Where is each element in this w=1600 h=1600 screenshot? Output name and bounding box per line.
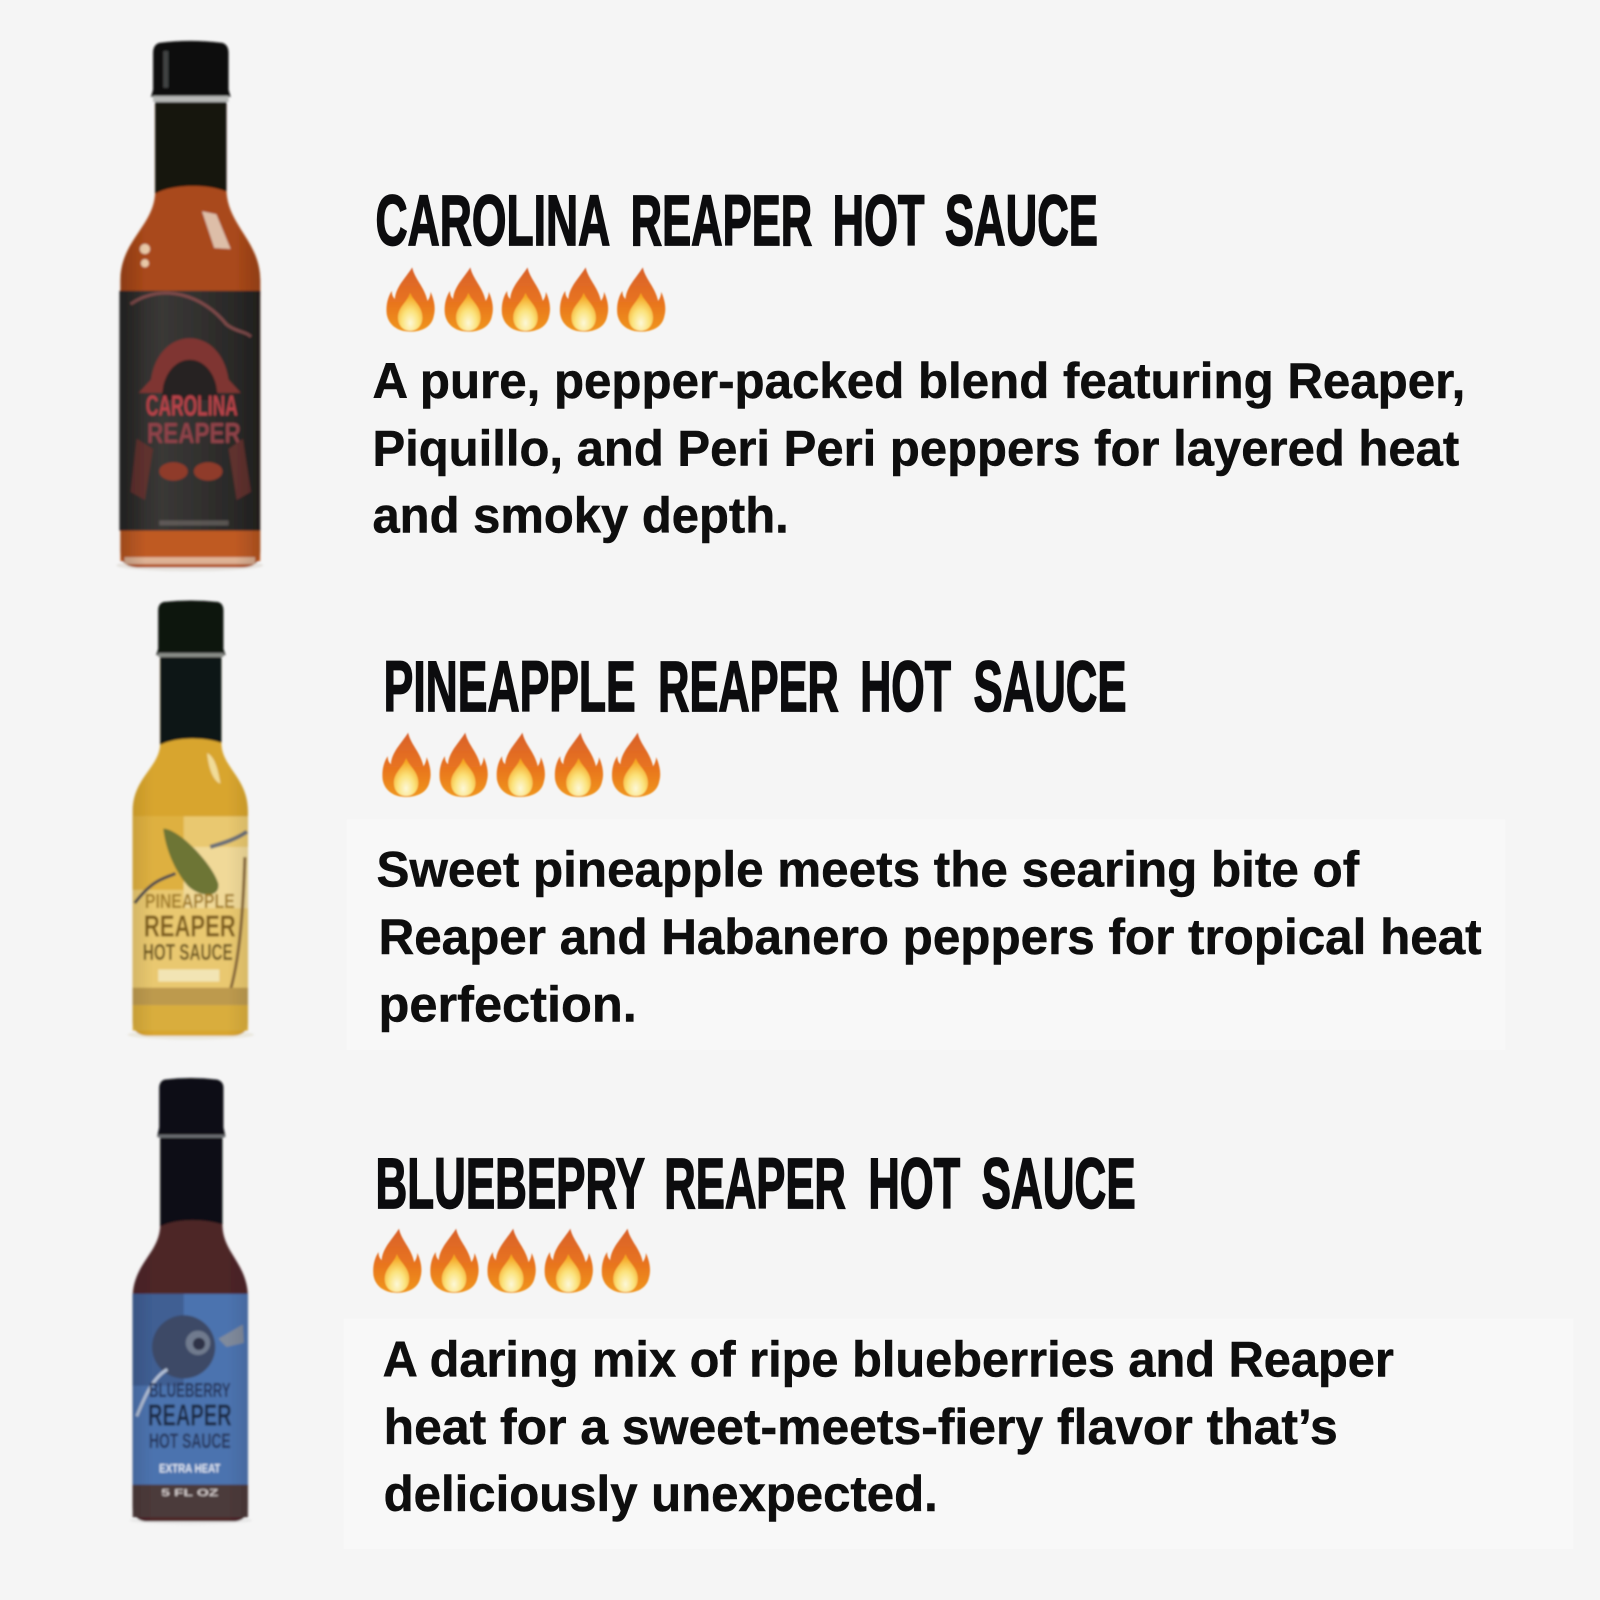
heading: Blueberry: BLUEBEPRY: [376, 1144, 645, 1224]
bottle: Pineapple Reaper: REAPER: [144, 910, 236, 944]
bottle cap: [156, 601, 226, 655]
bottle: Blueberry Reaper: 5 FL OZ: [161, 1488, 218, 1499]
bottle cap: [151, 41, 231, 97]
bottle: Pineapple Reaper: PINEAPPLE: [145, 891, 235, 913]
heading: Carolina: REAPER: [631, 181, 812, 261]
bottle: Blueberry Reaper: HOT SAUCE: [149, 1429, 231, 1453]
description: Blueberry: [383, 1332, 1394, 1522]
bottle: Pineapple Reaper: [128, 601, 254, 1040]
heading: Pineapple: [384, 647, 1127, 727]
heading: Carolina: HOT: [833, 181, 924, 261]
label: [133, 816, 248, 1005]
bottle: Blueberry Reaper: REAPER: [148, 1399, 232, 1433]
description: Pineapple: [377, 842, 1482, 1032]
heading: Blueberry: REAPER: [664, 1144, 846, 1224]
description: Carolina: Piquillo, and Peri Peri peppers for layered heat: [372, 420, 1460, 476]
description: Pineapple: Reaper and Habanero peppers for tropical heat: [379, 909, 1482, 965]
heading: Pineapple: REAPER: [658, 647, 839, 727]
heading: Blueberry: SAUCE: [982, 1144, 1136, 1224]
bottle: Pineapple Reaper: HOT SAUCE: [143, 939, 233, 965]
heading: Pineapple: HOT: [860, 647, 951, 727]
heading: Pineapple: SAUCE: [973, 647, 1127, 727]
heading: Carolina: CAROLINA: [376, 181, 610, 261]
bottle: Blueberry Reaper: [130, 1078, 252, 1524]
description: Carolina: [372, 353, 1465, 544]
bottle glass: [120, 97, 260, 567]
bottle cap: [157, 1078, 226, 1137]
label: [133, 1294, 248, 1485]
flame rating: Carolina: [386, 267, 665, 332]
heading: Blueberry: HOT: [868, 1144, 960, 1224]
description: Pineapple: Sweet pineapple meets the searing bite of: [377, 842, 1360, 898]
heading: Blueberry: [376, 1144, 1136, 1224]
bottle: Blueberry Reaper: EXTRA HEAT: [159, 1461, 221, 1475]
description: Blueberry: heat for a sweet-meets-fiery flavor that’s: [384, 1399, 1338, 1455]
description: Carolina: and smoky depth.: [372, 488, 789, 544]
description: Blueberry: deliciously unexpected.: [384, 1466, 938, 1522]
bottle glass: [133, 1135, 248, 1521]
description: Blueberry: A daring mix of ripe blueberries and Reaper: [383, 1332, 1394, 1388]
bottle: Blueberry Reaper: BLUEBERRY: [149, 1380, 231, 1402]
bottle: Carolina Reaper: REAPER: [147, 418, 241, 450]
heading: Carolina: [376, 181, 1098, 261]
description: Carolina: A pure, pepper-packed blend featuring Reaper,: [372, 353, 1465, 409]
flame rating: Pineapple: [382, 733, 660, 797]
label: [119, 291, 260, 531]
bottle: Carolina Reaper: CAROLINA: [146, 390, 238, 422]
flame rating: Blueberry: [373, 1229, 650, 1293]
heading: Pineapple: PINEAPPLE: [384, 647, 636, 727]
heading: Carolina: SAUCE: [945, 181, 1098, 261]
bottle: Carolina Reaper: [116, 41, 263, 571]
description: Pineapple: perfection.: [379, 976, 637, 1032]
bottle glass: [133, 653, 248, 1036]
